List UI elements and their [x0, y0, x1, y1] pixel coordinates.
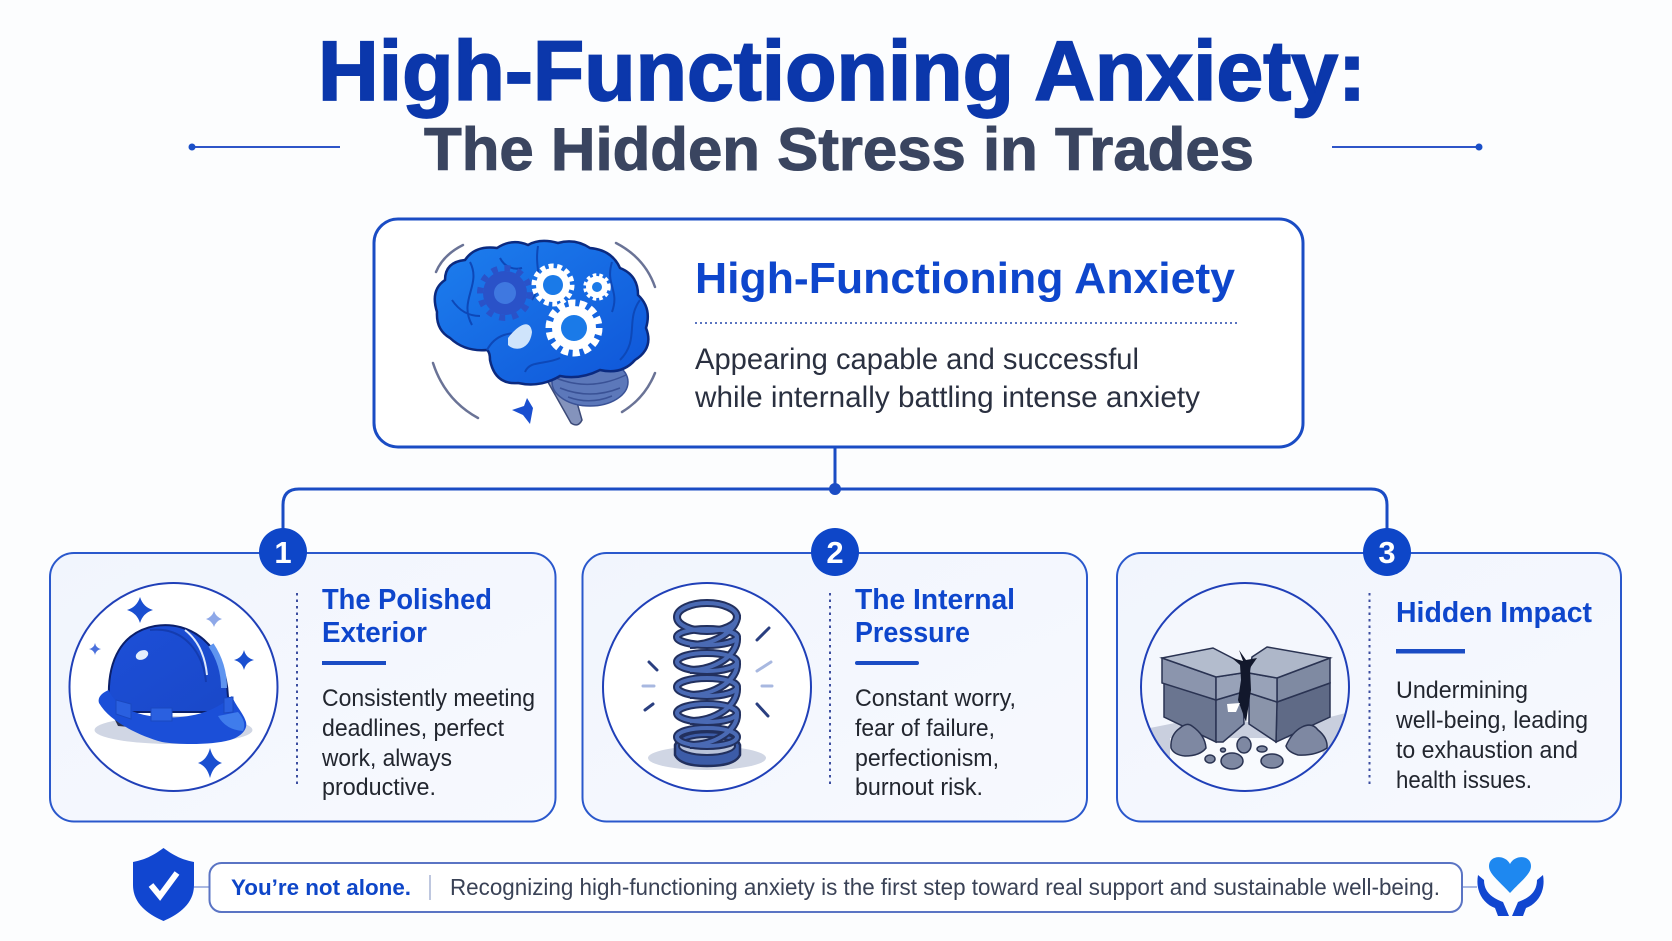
card 3 text: Undermining [1396, 677, 1528, 704]
icon: compressed spring in circle [603, 583, 811, 791]
badge 2 [811, 528, 859, 576]
icon: shield with check [133, 848, 194, 921]
title decoration right [1332, 144, 1482, 150]
card 1 text: productive. [322, 774, 436, 801]
card 3 text: to exhaustion and [1396, 737, 1578, 764]
gear: medium [534, 266, 572, 304]
icon: hard hat in circle [70, 583, 278, 791]
badge 3 [1363, 528, 1411, 576]
panel: hidden impact [1117, 553, 1621, 822]
card 3 text [1395, 677, 1588, 794]
callout: you're not alone [210, 863, 1462, 912]
card 3 text: health issues. [1396, 767, 1532, 794]
card 2 heading: The Internal [855, 584, 1015, 616]
card 1 text: deadlines, perfect [322, 715, 504, 742]
card 3 heading: Hidden Impact [1396, 597, 1592, 629]
icon: heart in hands [1477, 857, 1544, 916]
definition text: Appearing capable and successful [695, 343, 1139, 376]
definition text: while internally battling intense anxiety [694, 381, 1200, 414]
pressure ticks [643, 628, 772, 716]
callout: you're not alone: Recognizing high-functioning anxiety is the first step toward real support and sustainable well-being. [450, 874, 1440, 900]
card 1 heading: Exterior [322, 617, 427, 649]
icon: cracked concrete block in circle [1140, 583, 1350, 795]
card 1 heading [322, 584, 492, 649]
panel: the internal pressure [582, 553, 1087, 822]
card 2 heading: Pressure [855, 617, 970, 649]
title decoration left [188, 144, 340, 150]
badge 1 [259, 528, 307, 576]
card 2 text [855, 685, 1016, 801]
card 2 text: perfectionism, [855, 745, 999, 772]
left block [1164, 683, 1216, 742]
card 1 heading: The Polished [322, 584, 492, 616]
definition text [694, 343, 1200, 414]
panel: the polished exterior [50, 553, 556, 822]
tree connector [283, 447, 1387, 530]
right block [1276, 683, 1330, 742]
card 2 heading [855, 584, 1015, 649]
gear: large [549, 303, 599, 353]
sparkles [89, 597, 254, 778]
panel: definition [374, 219, 1303, 447]
icon: brain with gears [433, 241, 655, 425]
badge 1: 1 [274, 535, 292, 570]
badge 3: 3 [1378, 535, 1396, 570]
crack [1232, 650, 1257, 722]
subtitle: The Hidden Stress in Trades [424, 116, 1254, 183]
title [318, 24, 1366, 183]
callout: you're not alone: You’re not alone. [231, 875, 411, 900]
card 2 text: fear of failure, [855, 715, 995, 742]
definition heading: High-Functioning Anxiety [695, 254, 1236, 303]
card 2 text: Constant worry, [855, 685, 1016, 712]
card 1 text: work, always [321, 745, 452, 772]
gear: small [585, 275, 609, 299]
rubble [1171, 724, 1327, 769]
badge 2: 2 [826, 535, 844, 570]
card 1 text: Consistently meeting [322, 685, 535, 712]
card 1 text [321, 685, 535, 801]
card 2 text: burnout risk. [855, 774, 983, 801]
card 3 text: well-being, leading [1395, 707, 1588, 734]
title: High-Functioning Anxiety: [318, 24, 1366, 118]
